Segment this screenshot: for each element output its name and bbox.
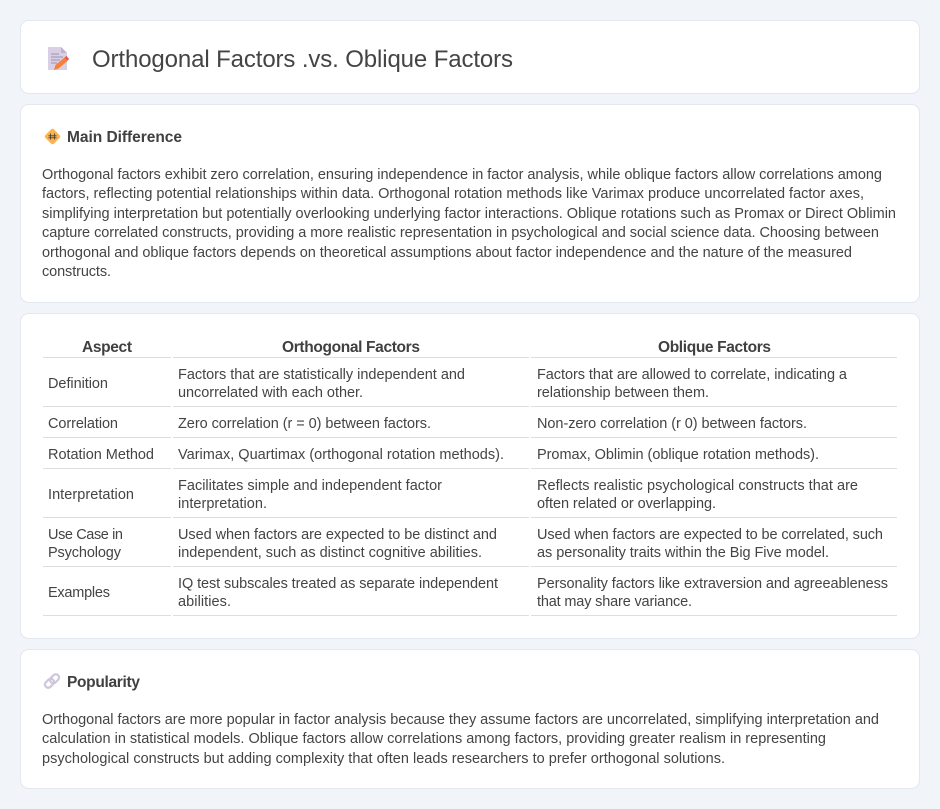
- row: interpretation: [48, 478, 858, 512]
- row: examples: that may share variance.: [537, 594, 692, 610]
- row: interpretation: Interpretation: [48, 487, 134, 503]
- row: use case in psychology: independent, such as distinct cognitive abilities.: [178, 545, 482, 561]
- text block: popularity paragraph: calculation in statistical models. Oblique factors allow correlations among factors, providing greater realism in representing: [42, 731, 826, 747]
- row: rotation method: [48, 447, 819, 463]
- panel: comparison table: [20, 314, 920, 638]
- row: definition: Factors that are statistically independent and: [178, 367, 465, 383]
- row: correlation: Correlation: [48, 416, 118, 432]
- row: use case in psychology: as personality traits within the Big Five model.: [537, 545, 829, 561]
- panel: page header: [20, 20, 920, 94]
- row: correlation: [48, 416, 807, 432]
- icon: document with pencil: [48, 47, 69, 70]
- row: interpretation: Reflects realistic psychological constructs that are: [537, 478, 858, 494]
- text block: main difference paragraph: constructs.: [42, 264, 111, 280]
- row: interpretation: interpretation.: [178, 496, 267, 512]
- row: definition: uncorrelated with each other.: [178, 385, 363, 401]
- row: correlation: Non-zero correlation (r 0) between factors.: [537, 416, 807, 432]
- panel: popularity: [20, 650, 920, 788]
- row: interpretation: often related or overlapping.: [537, 496, 716, 512]
- text block: main difference paragraph: orthogonal and oblique factors depends on theoretical assumptions about factor independence and the nature of the measured: [42, 245, 852, 261]
- icon: chain link: [44, 673, 60, 689]
- text block: popularity paragraph: [42, 712, 879, 767]
- row: use case in psychology: Used when factors are expected to be distinct and: [178, 527, 497, 543]
- row: rotation method: Promax, Oblimin (oblique rotation methods).: [537, 447, 819, 463]
- row: examples: [48, 576, 888, 610]
- row: examples: Personality factors like extraversion and agreeableness: [537, 576, 888, 592]
- row: examples: Examples: [48, 585, 110, 601]
- row: use case in psychology: Used when factors are expected to be correlated, such: [537, 527, 883, 543]
- row: definition: Factors that are allowed to correlate, indicating a: [537, 367, 848, 383]
- title: Orthogonal Factors .vs. Oblique Factors: [92, 46, 513, 73]
- row: use case in psychology: [48, 527, 883, 561]
- text block: main difference paragraph: capture correlated constructs, providing a more realistic representation in psychological and social science data. Choosing between: [42, 225, 879, 241]
- panel: main difference: [20, 104, 920, 302]
- row: definition: [48, 367, 848, 401]
- text block: main difference paragraph: simplifying interpretation but potentially overlooking underlying factor interactions. Oblique rotations such as Promax or Direct Oblimin: [42, 206, 896, 222]
- table header row: Aspect: [82, 339, 132, 356]
- text block: main difference paragraph: factors, reflecting potential relationships within data. Orthogonal rotation methods like Varimax produce uncorrelated factor axes,: [42, 186, 864, 202]
- icon: orange diamond: [44, 128, 61, 145]
- text block: popularity paragraph: Orthogonal factors are more popular in factor analysis because they assume factors are uncorrelated, simplifying interpretation and: [42, 712, 879, 728]
- heading: main difference: Main Difference: [67, 129, 182, 146]
- text block: main difference paragraph: [42, 167, 896, 280]
- row: rotation method: Varimax, Quartimax (orthogonal rotation methods).: [178, 447, 504, 463]
- row: interpretation: Facilitates simple and independent factor: [178, 478, 442, 494]
- heading: popularity: Popularity: [67, 674, 140, 691]
- row: use case in psychology: Psychology: [48, 545, 122, 561]
- table header row: [82, 339, 771, 356]
- row: definition: relationship between them.: [537, 385, 709, 401]
- row: examples: IQ test subscales treated as separate independent: [178, 576, 498, 592]
- table header row: Oblique Factors: [658, 339, 771, 356]
- table header row: Orthogonal Factors: [282, 339, 420, 356]
- row: correlation: Zero correlation (r = 0) between factors.: [178, 416, 431, 432]
- text block: main difference paragraph: Orthogonal factors exhibit zero correlation, ensuring independence in factor analysis, while oblique factors allow correlations among: [42, 167, 882, 183]
- text block: popularity paragraph: psychological constructs but adding complexity that often leads researchers to prefer orthogonal solutions.: [42, 751, 725, 767]
- row: examples: abilities.: [178, 594, 231, 610]
- row: rotation method: Rotation Method: [48, 447, 154, 463]
- row: definition: Definition: [48, 376, 108, 392]
- row: use case in psychology: Use Case in: [48, 527, 123, 543]
